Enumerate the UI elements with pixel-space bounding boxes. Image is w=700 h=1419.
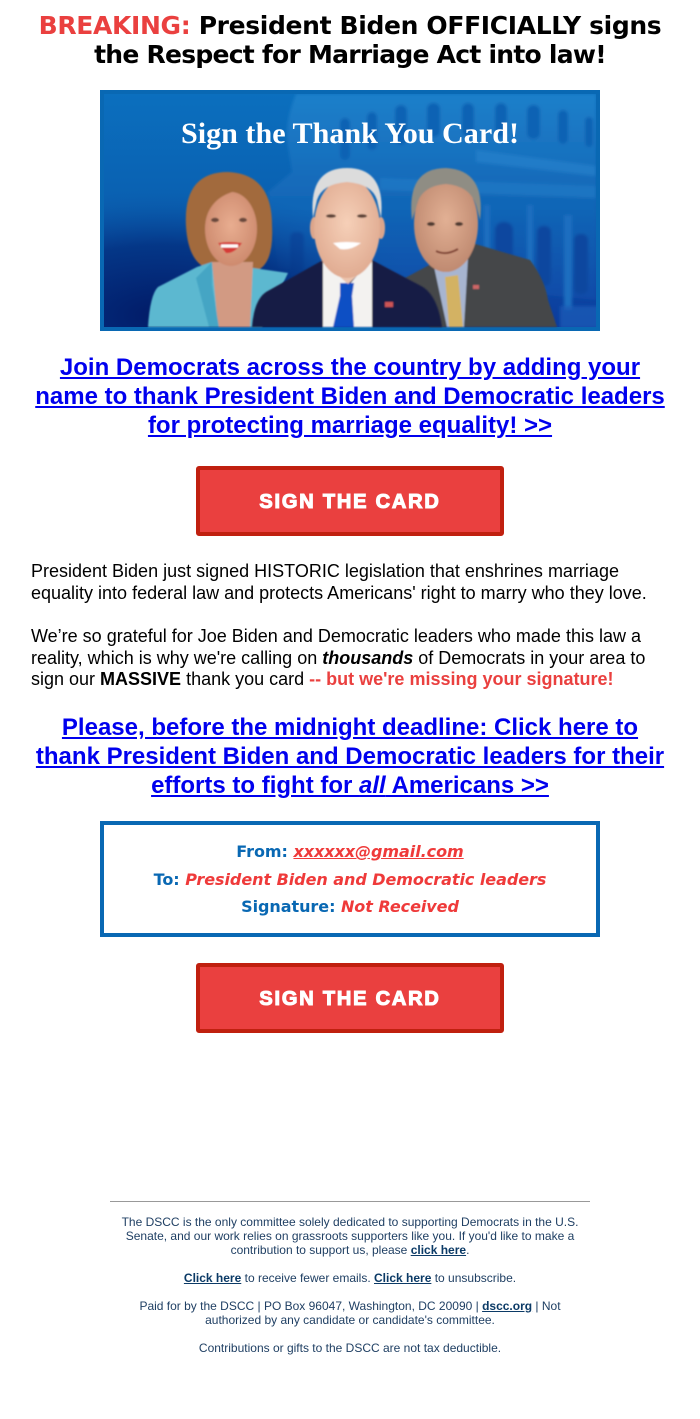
- title: the Respect for Marriage Act into law!: [94, 40, 606, 69]
- title: BREAKING: President Biden OFFICIALLY signs: [39, 11, 661, 40]
- footer disclaimer: Paid for by the DSCC | PO Box 96047, Washington, DC 20090 | dscc.org | Not: [139, 1299, 561, 1313]
- signature status box: [100, 821, 600, 937]
- button: sign the card: [196, 963, 504, 1033]
- call to action link 1: for protecting marriage equality! >>: [148, 412, 552, 439]
- capitol building: [268, 94, 600, 328]
- paragraph 1: [31, 561, 647, 603]
- footer disclaimer: Senate, and our work relies on grassroots supporters like you. If you'd like to make a: [126, 1229, 574, 1243]
- button: sign the card: SIGN THE CARD: [259, 491, 441, 513]
- portrait: Biden: [252, 168, 442, 327]
- footer disclaimer: Click here to receive fewer emails. Click here to unsubscribe.: [184, 1271, 516, 1285]
- call to action link 2: thank President Biden and Democratic leaders for their: [36, 743, 664, 770]
- portrait: Schumer: [405, 168, 557, 327]
- title: [39, 11, 661, 69]
- footer disclaimer: contribution to support us, please click here.: [231, 1243, 469, 1257]
- paragraph 2: sign our MASSIVE thank you card -- but we're missing your signature!: [31, 669, 613, 689]
- paragraph 2: We’re so grateful for Joe Biden and Democratic leaders who made this law a: [31, 626, 641, 646]
- paragraph 1: equality into federal law and protects Americans' right to marry who they love.: [31, 582, 647, 602]
- footer disclaimer: [122, 1215, 578, 1355]
- paragraph 1: President Biden just signed HISTORIC legislation that enshrines marriage: [31, 561, 619, 581]
- signature line: Signature: Not Received: [241, 897, 459, 916]
- call to action link 1: Join Democrats across the country by adding your: [60, 354, 640, 381]
- paragraph 2: [31, 626, 645, 689]
- paragraph 2: reality, which is why we're calling on thousands of Democrats in your area to: [31, 648, 645, 668]
- call to action link 2: [36, 714, 664, 799]
- footer disclaimer: The DSCC is the only committee solely dedicated to supporting Democrats in the U.S.: [122, 1215, 578, 1229]
- footer disclaimer: authorized by any candidate or candidate's committee.: [205, 1313, 495, 1327]
- from line: From: xxxxxx@gmail.com: [236, 842, 464, 861]
- banner heading: Sign the Thank You Card!: [181, 117, 519, 150]
- banner: thank you card with three leaders: [100, 90, 600, 331]
- call to action link 1: [35, 354, 665, 439]
- call to action link 2: Please, before the midnight deadline: Click here to: [62, 714, 638, 741]
- button: sign the card: SIGN THE CARD: [259, 988, 441, 1010]
- to line: To: President Biden and Democratic leaders: [154, 870, 546, 889]
- footer disclaimer: Contributions or gifts to the DSCC are not tax deductible.: [199, 1341, 501, 1355]
- button: sign the card: [196, 466, 504, 536]
- portrait: Pelosi: [148, 172, 288, 327]
- call to action link 2: efforts to fight for all Americans >>: [151, 772, 549, 799]
- call to action link 1: name to thank President Biden and Democratic leaders: [35, 383, 665, 410]
